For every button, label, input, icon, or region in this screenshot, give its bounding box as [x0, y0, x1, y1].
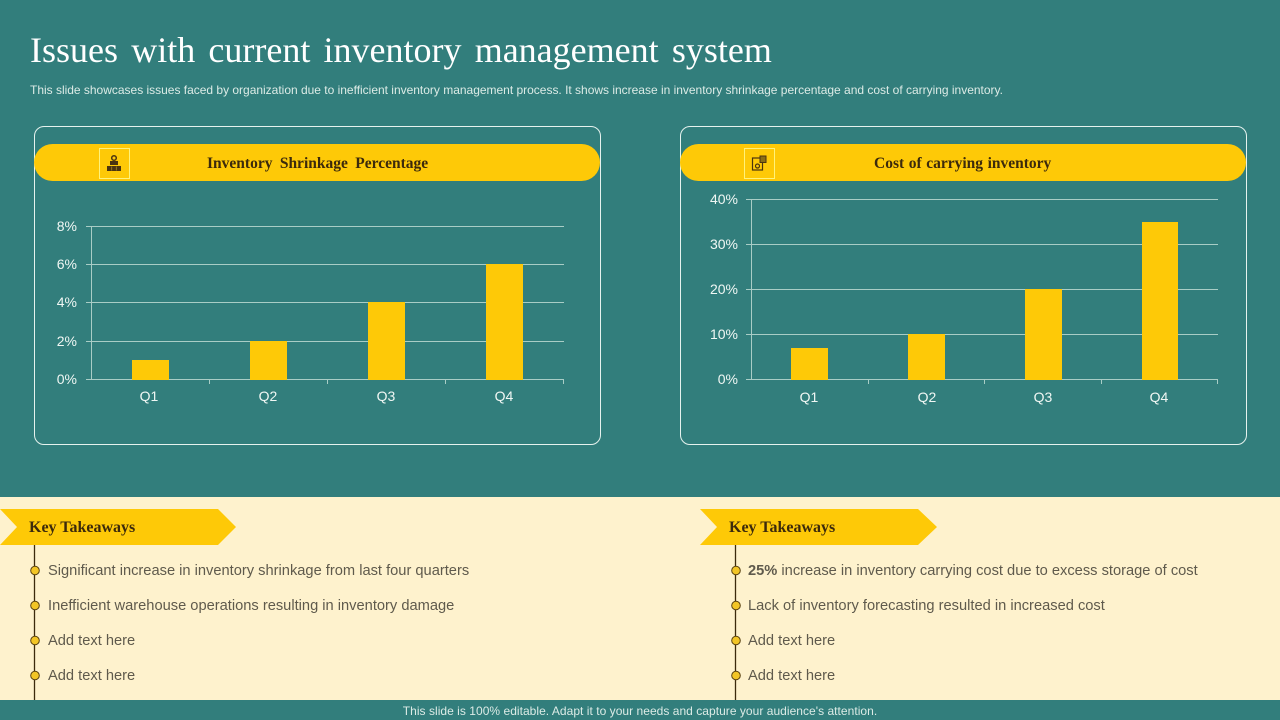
- takeaway heading right: Key Takeaways: [729, 519, 835, 536]
- chart: cost of carrying bars: 40%: [710, 191, 738, 207]
- panel: takeaways background: [0, 497, 1280, 700]
- chart: inventory shrinkage bars: [57, 218, 564, 404]
- chart: cost of carrying bars: 0%: [718, 371, 738, 387]
- takeaway text left 1: Significant increase in inventory shrinkage from last four quarters: [48, 563, 469, 579]
- chart: cost of carrying bars: 10%: [710, 326, 738, 342]
- chart: inventory shrinkage bars: 0%: [57, 371, 77, 387]
- heading: inventory shrinkage percentage: Inventory Shrinkage Percentage: [207, 155, 428, 172]
- takeaway heading left: Key Takeaways: [29, 519, 135, 536]
- takeaway text left 2: Inefficient warehouse operations resulting in inventory damage: [48, 598, 454, 614]
- panel: inventory shrinkage frame: [34, 126, 601, 445]
- takeaway text left 3: Add text here: [48, 633, 135, 649]
- chart: inventory shrinkage bars: 2%: [57, 333, 77, 349]
- chart: inventory shrinkage bars: Q3: [377, 388, 396, 404]
- heading pill: cost of carrying: [680, 144, 1246, 181]
- chart: cost of carrying bars: 30%: [710, 236, 738, 252]
- takeaway arrow right: [700, 509, 937, 545]
- heading: cost of carrying inventory: Cost of carrying inventory: [874, 155, 1051, 172]
- chart: cost of carrying bars: Q2: [918, 389, 937, 405]
- takeaway text right 3: Add text here: [748, 633, 835, 649]
- chart: inventory shrinkage bars: Q4: [495, 388, 514, 404]
- icon: boxes: [99, 148, 130, 179]
- chart: cost of carrying bars: Q4: [1150, 389, 1169, 405]
- chart: inventory shrinkage bars: Q1: [140, 388, 159, 404]
- panel: cost of carrying frame: [680, 126, 1247, 445]
- title: Issues with current inventory management system: [30, 30, 772, 70]
- timeline right: [731, 545, 741, 700]
- takeaway text right 4: Add text here: [748, 668, 835, 684]
- subtitle: This slide showcases issues faced by organization due to inefficient inventory management process. It shows increase in inventory shrinkage percentage and cost of carrying inventory.: [30, 83, 1003, 97]
- chart: cost of carrying bars: [710, 191, 1218, 405]
- footer note: This slide is 100% editable. Adapt it to your needs and capture your audience's attention.: [403, 704, 877, 718]
- takeaway arrow left: [0, 509, 236, 545]
- takeaway text left 4: Add text here: [48, 668, 135, 684]
- chart: inventory shrinkage bars: 8%: [57, 218, 77, 234]
- takeaway text right 1: 25% increase in inventory carrying cost due to excess storage of cost: [748, 563, 1198, 579]
- timeline left: [30, 545, 40, 700]
- takeaway text right 2: Lack of inventory forecasting resulted in increased cost: [748, 598, 1105, 614]
- icon: documents: [744, 148, 775, 179]
- chart: inventory shrinkage bars: Q2: [259, 388, 278, 404]
- heading pill: inventory shrinkage: [34, 144, 600, 181]
- chart: cost of carrying bars: Q1: [800, 389, 819, 405]
- chart: inventory shrinkage bars: 4%: [57, 294, 77, 310]
- chart: cost of carrying bars: 20%: [710, 281, 738, 297]
- chart: cost of carrying bars: Q3: [1034, 389, 1053, 405]
- chart: inventory shrinkage bars: 6%: [57, 256, 77, 272]
